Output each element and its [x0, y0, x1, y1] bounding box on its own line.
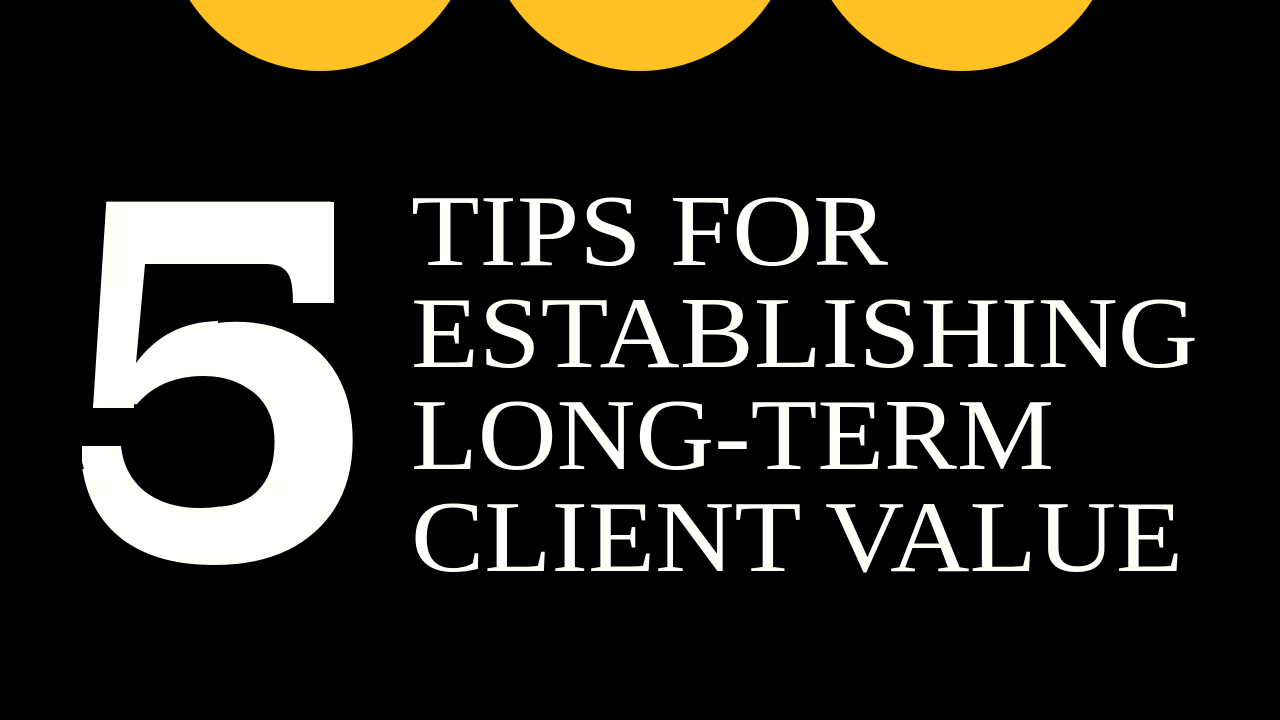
title line 3: LONG-TERM: [411, 379, 1054, 492]
title line 2: ESTABLISHING: [411, 277, 1198, 390]
decorative yellow circles row: [165, 0, 1117, 71]
title line 4: CLIENT VALUE: [411, 481, 1183, 594]
title line 1: TIPS FOR: [411, 175, 888, 288]
large numeral 5: 5: [67, 90, 367, 669]
title: [411, 175, 1198, 594]
